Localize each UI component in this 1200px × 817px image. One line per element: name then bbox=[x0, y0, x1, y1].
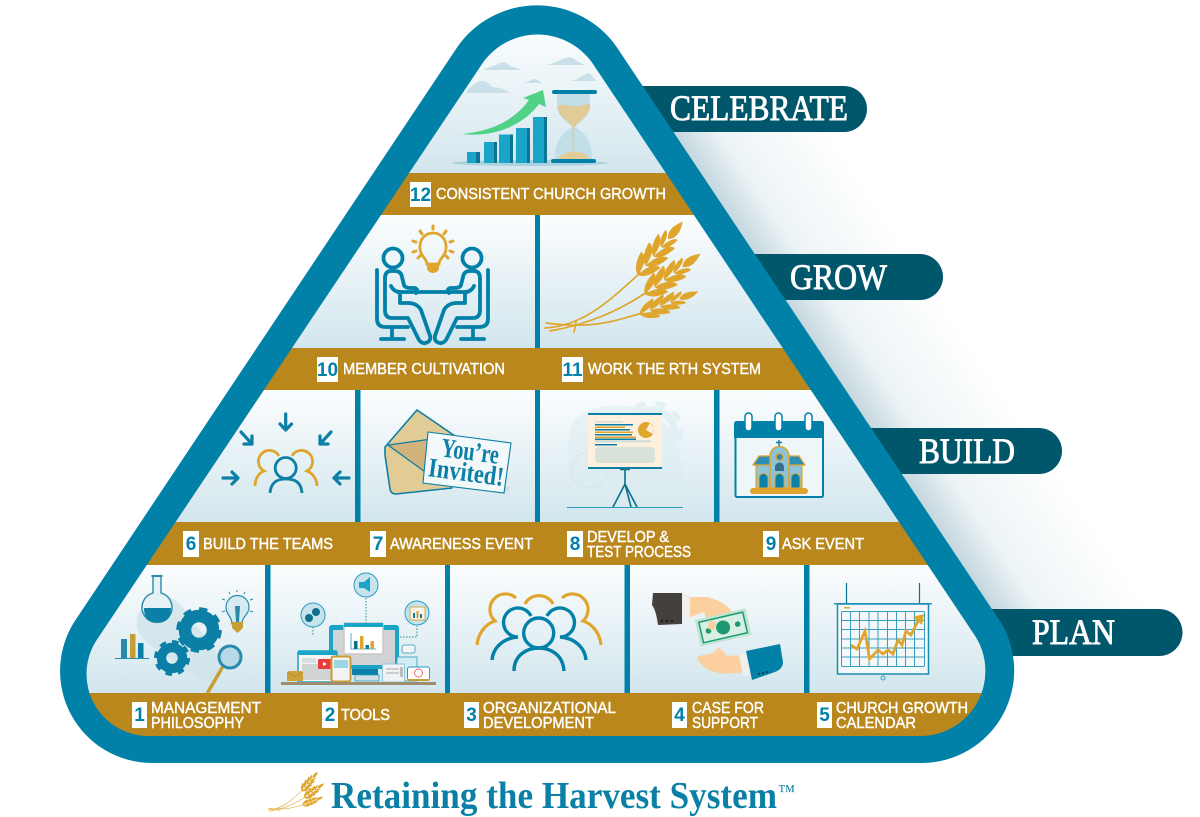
icon: invitation envelope bbox=[385, 410, 511, 494]
tab: PLAN: PLAN bbox=[1032, 612, 1115, 652]
label: 1 management philosophy: PHILOSOPHY bbox=[151, 715, 244, 732]
pyramid frame bbox=[60, 5, 1014, 763]
footer logo: wheat bbox=[268, 769, 327, 812]
tab: PLAN bbox=[940, 609, 1182, 656]
label: 1 management philosophy: 1 bbox=[134, 705, 145, 726]
icon: gears, flask, bulb and magnifier bbox=[115, 575, 253, 692]
drop shadow: grow tier bbox=[785, 300, 1030, 428]
label: 6 build the teams: BUILD THE TEAMS bbox=[203, 536, 333, 553]
icon: team with converging arrows bbox=[223, 414, 349, 493]
invitation card bbox=[423, 432, 511, 493]
label: 1 management philosophy: MANAGEMENT bbox=[151, 700, 262, 717]
panel: tier 12 background bbox=[408, 34, 666, 174]
label: 7 awareness event: AWARENESS EVENT bbox=[390, 536, 533, 553]
invitation card: You’re bbox=[439, 432, 501, 470]
label: 5 church growth calendar: CALENDAR bbox=[836, 715, 916, 732]
label: 12 consistent church growth: CONSISTENT CHURCH GROWTH bbox=[436, 186, 666, 203]
label: 2 tools bbox=[322, 702, 390, 728]
icon: growth chart and hourglass bbox=[452, 57, 608, 166]
label: 2 tools: TOOLS bbox=[341, 707, 390, 724]
label: 2 tools: 2 bbox=[325, 705, 335, 726]
label: 9 ask event: ASK EVENT bbox=[782, 536, 864, 553]
tab: GROW: GROW bbox=[790, 257, 887, 297]
band: tier 1-5 bbox=[60, 693, 1020, 737]
icon: wheat bbox=[545, 214, 708, 332]
label: 6 build the teams: 6 bbox=[186, 534, 196, 555]
tab: BUILD: BUILD bbox=[919, 431, 1015, 471]
drop shadow: build tier bbox=[902, 474, 1150, 609]
tab: BUILD bbox=[820, 428, 1062, 474]
label: 7 awareness event bbox=[370, 531, 533, 557]
label: 4 case for support: 4 bbox=[674, 705, 685, 726]
label: 3 organizational development: 3 bbox=[466, 705, 477, 726]
label: 10 member cultivation: MEMBER CULTIVATION bbox=[343, 361, 505, 378]
label: 4 case for support: SUPPORT bbox=[692, 715, 758, 732]
label: 9 ask event bbox=[763, 531, 864, 557]
label: 1 management philosophy bbox=[132, 700, 262, 732]
label: 4 case for support: CASE FOR bbox=[692, 700, 764, 717]
label: 3 organizational development: ORGANIZATIONAL bbox=[483, 700, 616, 717]
icon: two people at table with lightbulb bbox=[377, 226, 488, 343]
label: 11 work the rth system bbox=[562, 357, 761, 382]
label: 3 organizational development: DEVELOPMENT bbox=[483, 715, 594, 732]
label: 4 case for support bbox=[672, 700, 764, 732]
invitation card: Invited! bbox=[427, 452, 506, 492]
church bbox=[750, 440, 808, 494]
label: 12 consistent church growth bbox=[410, 182, 666, 207]
footer title: Retaining the Harvest System bbox=[331, 775, 777, 817]
label: 10 member cultivation: 10 bbox=[317, 360, 338, 381]
label: 11 work the rth system: 11 bbox=[562, 360, 583, 381]
icon: digital tools bbox=[281, 573, 436, 685]
tab: GROW bbox=[700, 254, 943, 300]
icon: hands exchanging money bbox=[652, 593, 783, 680]
label: 7 awareness event: 7 bbox=[373, 534, 383, 555]
label: 6 build the teams bbox=[183, 531, 333, 557]
trademark symbol: ™ bbox=[778, 781, 795, 801]
panel: tier 10-11 background bbox=[291, 215, 784, 349]
label: 11 work the rth system: WORK THE RTH SYSTEM bbox=[588, 361, 761, 378]
label: 9 ask event: 9 bbox=[766, 534, 776, 555]
label: 10 member cultivation bbox=[317, 357, 505, 382]
label: 3 organizational development bbox=[464, 700, 616, 732]
label: 8 develop and test process: TEST PROCESS bbox=[587, 544, 691, 561]
icon: presentation board bbox=[567, 403, 685, 508]
label: 8 develop and test process bbox=[567, 529, 691, 561]
label: 5 church growth calendar: 5 bbox=[819, 705, 830, 726]
icon: growth chart on hanging board bbox=[834, 583, 932, 680]
drop shadow: celebrate tier bbox=[673, 132, 900, 254]
band: tier 10-11 bbox=[264, 348, 811, 390]
tab: CELEBRATE: CELEBRATE bbox=[670, 88, 848, 128]
icon: organization group bbox=[477, 594, 601, 671]
icon: calendar with church bbox=[734, 413, 824, 497]
panel: tier 6-9 background bbox=[175, 390, 900, 523]
panel: tier 1-5 background bbox=[60, 565, 1020, 694]
pyramid interior bbox=[60, 30, 1020, 737]
label: 5 church growth calendar: CHURCH GROWTH bbox=[836, 700, 968, 717]
label: 5 church growth calendar bbox=[817, 700, 968, 732]
band: tier 12 bbox=[381, 173, 694, 215]
tab: CELEBRATE bbox=[620, 86, 867, 132]
label: 8 develop and test process: 8 bbox=[570, 534, 580, 555]
label: 12 consistent church growth: 12 bbox=[410, 185, 431, 206]
band: tier 6-9 bbox=[146, 522, 928, 565]
label: 8 develop and test process: DEVELOP & bbox=[587, 529, 670, 546]
